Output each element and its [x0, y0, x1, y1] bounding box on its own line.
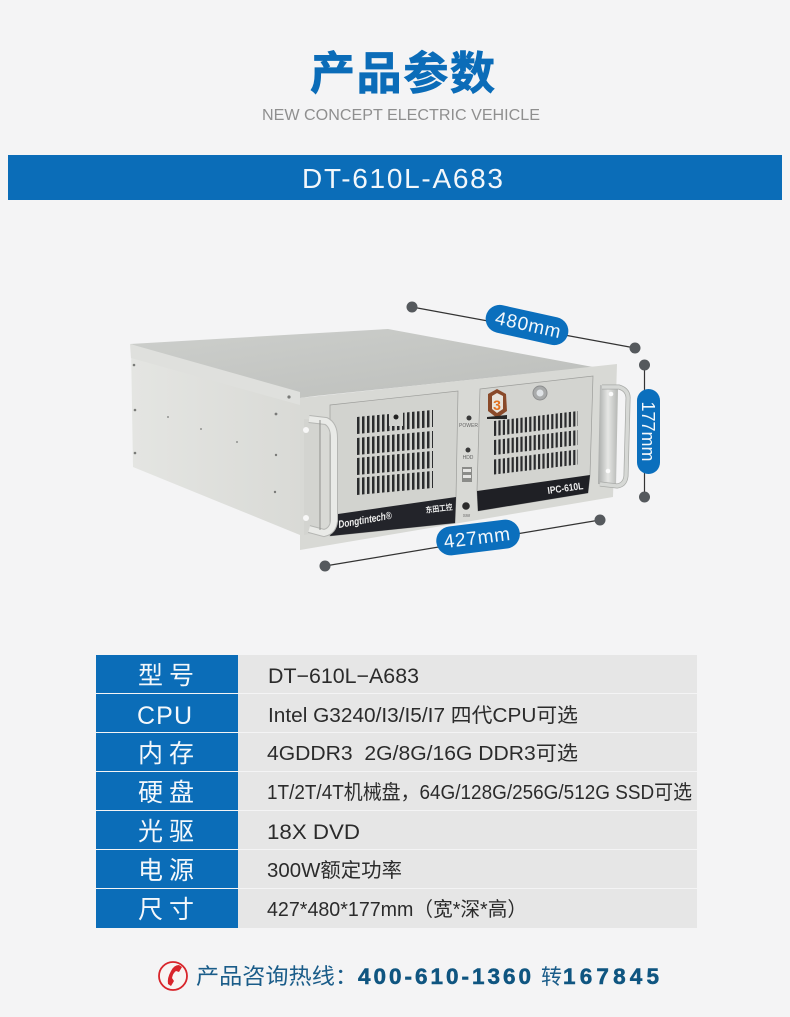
- row: optical drive: 18X DVD: [267, 821, 360, 844]
- row: model: DT−610L−A683: [268, 665, 419, 688]
- hotline: 167845: [563, 964, 659, 989]
- left handle: [303, 419, 334, 535]
- centre indicators: HDD: [463, 455, 474, 461]
- icon: phone: [159, 962, 187, 990]
- row: storage: 1T/2T/4T机械盘，64G/128G/256G/512G SSD可选: [267, 781, 692, 804]
- right drive bay: [477, 376, 593, 511]
- row: model: 型 号: [138, 662, 194, 690]
- right vents: [494, 419, 578, 467]
- chassis side: [131, 345, 300, 535]
- row: size: [96, 889, 697, 928]
- row: memory: 内 存: [138, 740, 194, 768]
- row: storage: [96, 772, 697, 810]
- centre indicators: POWER: [459, 423, 478, 429]
- dimension: 427mm: 427mm: [443, 524, 512, 553]
- left drive bay: 东田工控: [425, 502, 453, 515]
- row: size: 尺 寸: [138, 896, 194, 924]
- product image: industrial chassis: [130, 329, 628, 550]
- right handle: [598, 385, 628, 486]
- dimension: 427mm: [320, 514, 606, 572]
- row: optical drive: [96, 811, 697, 849]
- row: storage: 硬 盘: [138, 779, 194, 807]
- row: power: [96, 850, 697, 888]
- model banner: DT-610L-A683: [302, 163, 503, 194]
- hotline number: 400-610-1360: [358, 964, 531, 989]
- row: size: 427*480*177mm（宽*深*高）: [267, 898, 527, 921]
- right drive bay: IPC-610L: [547, 481, 584, 497]
- dimension: 177mm: 177mm: [638, 401, 658, 462]
- model banner: [8, 155, 782, 200]
- centre indicators: SW: [463, 513, 471, 518]
- subtitle: NEW CONCEPT ELECTRIC VEHICLE: [262, 107, 540, 124]
- dimension: 177mm: [637, 360, 660, 502]
- row: model: [96, 655, 697, 693]
- side screws: [133, 364, 291, 493]
- brand text: Dongtintech®: [337, 510, 393, 531]
- hotline: [159, 962, 659, 990]
- warranty badge: 3: [493, 397, 501, 413]
- row: optical drive: 光 驱: [138, 818, 194, 846]
- extension: 转: [541, 966, 562, 989]
- row: CPU: [96, 694, 697, 732]
- front panel: [300, 364, 617, 550]
- title: 产品参数: [310, 48, 495, 99]
- row: power: 300W额定功率: [267, 859, 402, 882]
- left vents: [357, 418, 433, 486]
- row: CPU: CPU: [137, 702, 192, 730]
- row: CPU: Intel G3240/I3/I5/I7 四代CPU可选: [268, 704, 578, 727]
- chassis top: [130, 329, 593, 398]
- dimension: 480mm: 480mm: [493, 308, 563, 343]
- dimension: 480mm: [406, 302, 640, 354]
- row: memory: 4GDDR3 2G/8G/16G DDR3可选: [267, 742, 578, 765]
- lock: [533, 386, 547, 400]
- left drive bay: [330, 391, 458, 536]
- row: memory: [96, 733, 697, 771]
- hotline label: 产品咨询热线：: [196, 964, 358, 989]
- row: power: 电 源: [138, 857, 194, 885]
- centre indicators: [459, 416, 478, 518]
- spec table: [96, 655, 697, 928]
